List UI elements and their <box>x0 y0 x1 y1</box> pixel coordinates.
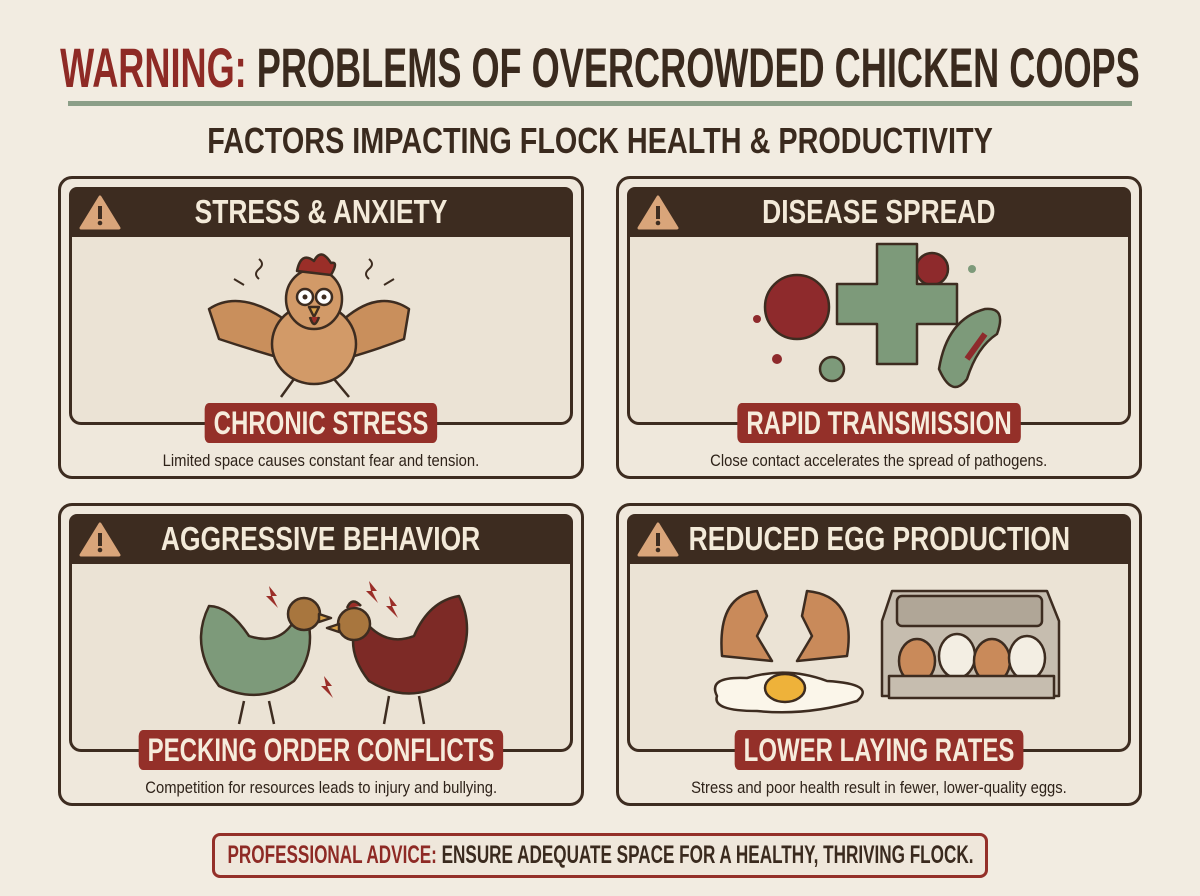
heading: disease <box>627 187 1131 237</box>
description: Limited space causes constant fear and tension. <box>163 451 479 470</box>
heading: eggs: REDUCED EGG PRODUCTION <box>688 520 1070 557</box>
description: Close contact accelerates the spread of pathogens. <box>710 451 1048 470</box>
callout: professional advice <box>212 833 988 878</box>
description: Stress and poor health result in fewer, lower-quality eggs. <box>691 778 1067 797</box>
icon: fighting chickens <box>200 581 468 724</box>
title: WARNING: PROBLEMS OF OVERCROWDED CHICKEN COOPS <box>60 36 1140 99</box>
heading: eggs <box>627 514 1131 564</box>
label: chronic stress: CHRONIC STRESS <box>214 405 428 441</box>
panel: stress & anxiety <box>58 176 584 479</box>
icon: pathogens and cross <box>753 242 1002 388</box>
icon: broken egg and carton <box>714 590 1060 714</box>
subtitle: FACTORS IMPACTING FLOCK HEALTH & PRODUCTIVITY <box>207 120 993 161</box>
heading: disease: DISEASE SPREAD <box>762 193 996 230</box>
label: rapid transmission: RAPID TRANSMISSION <box>746 405 1012 441</box>
callout: professional advice: PROFESSIONAL ADVICE: ENSURE ADEQUATE SPACE FOR A HEALTHY, THRIVING FLOCK. <box>227 841 973 869</box>
heading: aggressive: AGGRESSIVE BEHAVIOR <box>161 520 481 557</box>
description: Competition for resources leads to injury and bullying. <box>145 778 497 797</box>
panel: reduced egg production <box>616 503 1142 806</box>
label: pecking order conflicts: PECKING ORDER CONFLICTS <box>148 732 494 768</box>
panel: aggressive behavior <box>58 503 584 806</box>
panel: disease spread <box>616 176 1142 479</box>
icon: stressed chicken <box>208 253 410 398</box>
heading: aggressive <box>69 514 573 564</box>
heading: stress: STRESS & ANXIETY <box>195 193 447 230</box>
label: lower laying rates: LOWER LAYING RATES <box>744 732 1014 768</box>
heading: stress <box>69 187 573 237</box>
